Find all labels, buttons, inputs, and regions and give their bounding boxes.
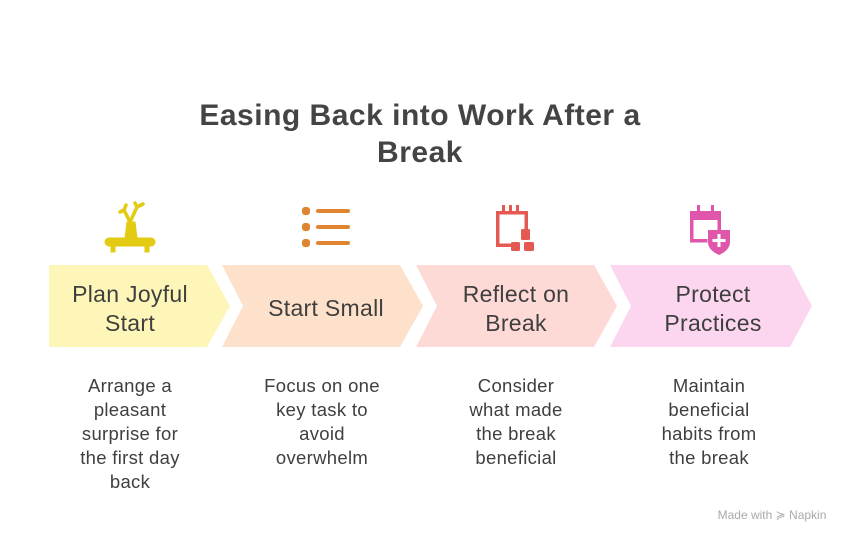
description 4: habits from: [662, 423, 756, 444]
description 1: the first day: [80, 447, 180, 468]
description 3: beneficial: [475, 447, 557, 468]
description 3: [469, 375, 563, 468]
label: start small: Start Small: [268, 295, 384, 321]
chevron: protect practices: [610, 265, 812, 347]
label: reflect on break: Break: [485, 310, 547, 336]
label: protect practices: [664, 281, 762, 336]
label: plan joyful start: Start: [105, 310, 155, 336]
icon: list: [302, 207, 350, 247]
description 3: what made: [469, 399, 563, 420]
chevron: reflect on break: [416, 265, 617, 347]
label: plan joyful start: [72, 281, 188, 336]
icon: calendar shield: [690, 205, 730, 255]
description 1: [80, 375, 180, 492]
label: reflect on break: Reflect on: [463, 281, 569, 307]
chevron: plan joyful start: [49, 265, 230, 347]
label: reflect on break: [463, 281, 569, 336]
description 2: Focus on one: [264, 375, 380, 396]
description 2: key task to: [276, 399, 368, 420]
description 2: avoid: [299, 423, 345, 444]
icon: tree on bench: [105, 203, 155, 252]
description 1: surprise for: [82, 423, 178, 444]
icon: calendar blocks: [496, 205, 534, 251]
description 1: back: [110, 471, 150, 492]
title: Easing Back into Work After a: [199, 99, 641, 132]
title: Break: [377, 136, 463, 169]
description 4: beneficial: [668, 399, 750, 420]
footer: made with napkin: Made with ≽ Napkin: [718, 508, 826, 522]
label: protect practices: Protect: [676, 281, 750, 307]
description 2: overwhelm: [276, 447, 368, 468]
chevron: start small: [222, 265, 423, 347]
label: protect practices: Practices: [664, 310, 762, 336]
description 3: the break: [476, 423, 556, 444]
description 4: [662, 375, 756, 468]
description 1: Arrange a: [88, 375, 172, 396]
description 3: Consider: [478, 375, 554, 396]
description 2: [264, 375, 380, 468]
description 1: pleasant: [94, 399, 166, 420]
description 4: Maintain: [673, 375, 745, 396]
description 4: the break: [669, 447, 749, 468]
title: [199, 99, 641, 169]
label: plan joyful start: Plan Joyful: [72, 281, 188, 307]
